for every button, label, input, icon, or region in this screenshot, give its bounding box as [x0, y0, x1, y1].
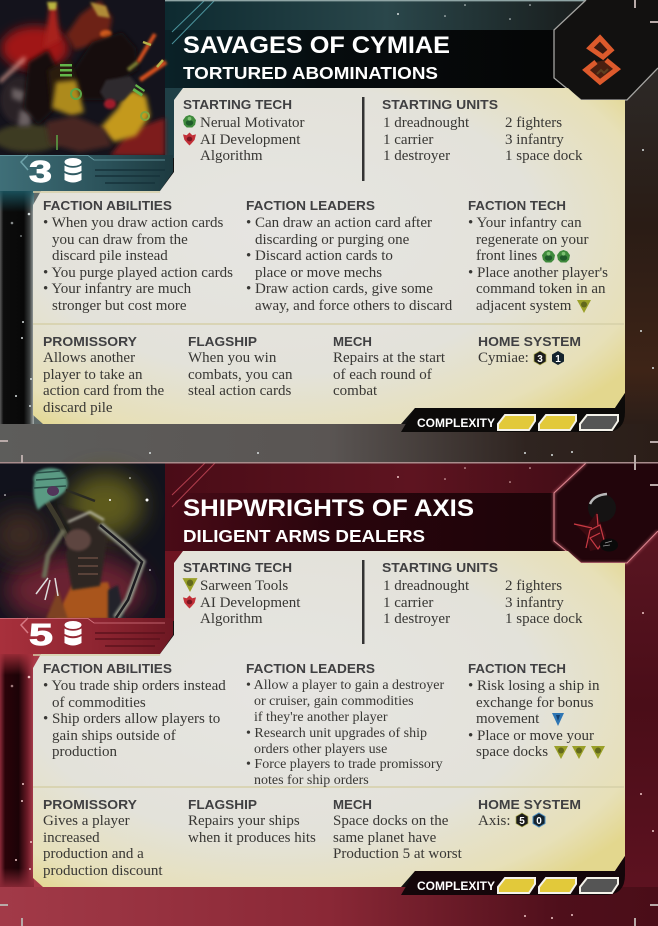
starting units: 2 fighters	[505, 115, 562, 131]
faction abilities: discard pile instead	[52, 248, 168, 264]
mech: Space docks on the	[333, 813, 449, 829]
faction abilities: • Your infantry are much	[43, 281, 192, 297]
title: SAVAGES OF CYMIAE	[183, 32, 450, 59]
starting units: 1 space dock	[505, 611, 583, 627]
commodity number: 3	[29, 154, 52, 189]
mech	[333, 797, 463, 862]
flagship: FLAGSHIP	[188, 334, 257, 349]
faction leaders: notes for ship orders	[254, 773, 369, 788]
faction leaders: orders other players use	[254, 742, 387, 757]
starting tech: Algorithm	[200, 148, 263, 164]
faction abilities: you can draw from the	[52, 232, 188, 248]
starting tech	[182, 560, 301, 627]
mech: of each round of	[333, 367, 432, 383]
faction tech	[468, 198, 608, 314]
faction abilities: • You trade ship orders instead	[43, 678, 226, 694]
starting units	[382, 97, 583, 164]
faction tech: exchange for bonus	[476, 695, 594, 711]
starting units: 3 infantry	[505, 132, 564, 148]
flagship: When you win	[188, 350, 277, 366]
starting units: STARTING UNITS	[382, 97, 498, 112]
promissory: increased	[43, 830, 100, 846]
promissory: PROMISSORY	[43, 334, 137, 349]
home system	[478, 797, 581, 829]
mech: MECH	[333, 797, 372, 812]
faction leaders: • Can draw an action card after	[246, 215, 432, 231]
faction tech: adjacent system	[476, 298, 572, 314]
home system: Axis:	[478, 813, 511, 829]
faction abilities: FACTION ABILITIES	[43, 661, 172, 676]
complexity bar	[401, 393, 625, 432]
portrait: Axis alien	[0, 463, 165, 626]
faction abilities: stronger but cost more	[52, 298, 187, 314]
faction tech: • Place or move your	[468, 728, 594, 744]
complexity bar: COMPLEXITY	[417, 416, 495, 430]
starting units: 1 space dock	[505, 148, 583, 164]
home system: Cymiae:	[478, 350, 529, 366]
promissory: Allows another	[43, 350, 135, 366]
subtitle: TORTURED ABOMINATIONS	[183, 63, 438, 83]
faction leaders: FACTION LEADERS	[246, 198, 375, 213]
icon: commodity stack	[64, 158, 82, 182]
flagship	[188, 797, 316, 846]
starting tech	[183, 97, 305, 164]
home system: 1	[555, 354, 561, 365]
home system: 0	[536, 816, 542, 827]
faction abilities: production	[52, 744, 117, 760]
commodity number: 5	[29, 617, 53, 652]
mech: MECH	[333, 334, 372, 349]
mech	[333, 334, 446, 399]
starting tech: AI Development	[200, 595, 301, 611]
divider	[362, 97, 364, 181]
promissory: player to take an	[43, 367, 143, 383]
complexity bar	[401, 856, 625, 895]
faction abilities: • You purge played action cards	[43, 265, 233, 281]
starting units: 2 fighters	[505, 578, 562, 594]
flagship: Repairs your ships	[188, 813, 300, 829]
starting tech: STARTING TECH	[183, 560, 292, 575]
faction tech: movement	[476, 711, 540, 727]
starting tech: Nerual Motivator	[200, 115, 305, 131]
starting tech: Algorithm	[200, 611, 263, 627]
flagship: FLAGSHIP	[188, 797, 257, 812]
faction leaders	[246, 198, 453, 314]
divider	[362, 560, 364, 644]
starting units: 1 carrier	[383, 595, 433, 611]
faction leaders: discarding or purging one	[255, 232, 410, 248]
mech: same planet have	[333, 830, 437, 846]
faction leaders: place or move mechs	[255, 265, 382, 281]
promissory: Gives a player	[43, 813, 130, 829]
mech: combat	[333, 383, 378, 399]
faction leaders: • Allow a player to gain a destroyer	[246, 678, 444, 693]
starting units: 1 destroyer	[383, 611, 450, 627]
card background	[0, 0, 658, 463]
faction tech: regenerate on your	[476, 232, 588, 248]
faction leaders: FACTION LEADERS	[246, 661, 375, 676]
faction tech: FACTION TECH	[468, 198, 566, 213]
mech: Repairs at the start	[333, 350, 446, 366]
cost tab	[0, 154, 173, 191]
mech: Production 5 at worst	[333, 846, 463, 862]
starting units: 3 infantry	[505, 595, 564, 611]
title: SHIPWRIGHTS OF AXIS	[183, 495, 474, 522]
faction abilities: • When you draw action cards	[43, 215, 223, 231]
starting tech: AI Development	[200, 132, 301, 148]
promissory: production discount	[43, 863, 163, 879]
faction leaders: • Force players to trade promissory	[246, 757, 443, 772]
faction tech: • Risk losing a ship in	[468, 678, 600, 694]
flagship: when it produces hits	[188, 830, 316, 846]
faction leaders: if they're another player	[254, 710, 388, 725]
flagship	[188, 334, 293, 399]
flagship: combats, you can	[188, 367, 293, 383]
promissory	[43, 334, 165, 416]
starting units: STARTING UNITS	[382, 560, 498, 575]
portrait: savage creature	[0, 0, 166, 156]
faction leaders: or cruiser, gain commodities	[254, 694, 414, 709]
faction tech: command token in an	[476, 281, 606, 297]
card: Savages of Cymiae	[0, 0, 658, 463]
starting units: 1 destroyer	[383, 148, 450, 164]
card: Shipwrights of Axis	[0, 463, 658, 926]
faction leaders	[246, 661, 444, 788]
faction abilities: gain ships outside of	[52, 728, 176, 744]
flagship: steal action cards	[188, 383, 291, 399]
promissory: PROMISSORY	[43, 797, 137, 812]
faction abilities	[43, 198, 233, 314]
starting units: 1 dreadnought	[383, 115, 470, 131]
panel: rules card	[33, 551, 625, 895]
subtitle: DILIGENT ARMS DEALERS	[183, 526, 425, 546]
faction leaders: • Discard action cards to	[246, 248, 393, 264]
promissory	[43, 797, 163, 879]
home system: HOME SYSTEM	[478, 334, 581, 349]
faction tech: space docks	[476, 744, 548, 760]
faction tech: front lines	[476, 248, 537, 264]
faction tech	[468, 661, 605, 760]
faction leaders: • Research unit upgrades of ship	[246, 726, 427, 741]
panel: rules card	[33, 88, 625, 432]
faction abilities	[43, 661, 226, 760]
cost tab	[0, 617, 173, 654]
starting tech: STARTING TECH	[183, 97, 292, 112]
home system: 5	[519, 816, 525, 827]
faction leaders: • Draw action cards, give some	[246, 281, 433, 297]
faction tech: • Place another player's	[468, 265, 608, 281]
faction abilities: FACTION ABILITIES	[43, 198, 172, 213]
faction leaders: away, and force others to discard	[255, 298, 453, 314]
faction abilities: • Ship orders allow players to	[43, 711, 220, 727]
starting units: 1 carrier	[383, 132, 433, 148]
faction tech: FACTION TECH	[468, 661, 566, 676]
starting units: 1 dreadnought	[383, 578, 470, 594]
home system: HOME SYSTEM	[478, 797, 581, 812]
icon: faction octagon	[554, 0, 658, 100]
complexity bar: COMPLEXITY	[417, 879, 495, 893]
promissory: discard pile	[43, 400, 113, 416]
card background	[0, 463, 658, 926]
starting tech: Sarween Tools	[200, 578, 288, 594]
promissory: action card from the	[43, 383, 165, 399]
home system	[478, 334, 581, 366]
promissory: production and a	[43, 846, 144, 862]
home system: 3	[537, 354, 543, 365]
faction tech: • Your infantry can	[468, 215, 582, 231]
faction abilities: of commodities	[52, 695, 146, 711]
icon: faction octagon	[554, 463, 658, 563]
starting units	[382, 560, 583, 627]
icon: commodity stack	[64, 621, 82, 646]
